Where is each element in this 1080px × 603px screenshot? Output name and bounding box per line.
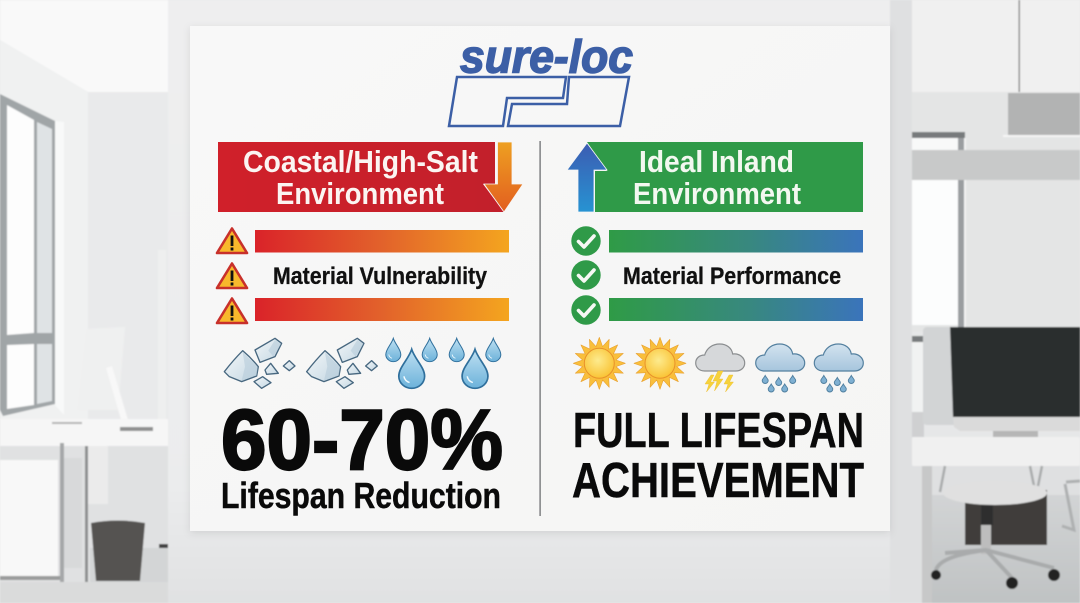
poster board [190,26,890,531]
icon: check 3 [571,295,601,325]
office chair [931,481,1080,589]
icon: rain cloud 2 [814,344,863,392]
stat: full lifespan: FULL LIFESPAN [573,404,864,458]
logo: sure-loc [449,30,633,126]
bar: performance top [609,230,863,252]
icon: sun 2 [634,337,686,389]
panel: ideal inland environment [567,142,864,508]
stat label: lifespan reduction: Lifespan Reduction [221,475,501,516]
divider [539,141,541,516]
stat: 60-70%: 60-70% [221,393,503,488]
bar: vulnerability bottom [255,298,509,321]
waste bin [91,520,145,581]
stat: achievement: ACHIEVEMENT [572,454,864,508]
icon: down arrow [484,142,523,212]
icon: thunder cloud [696,344,745,392]
icon: warning 1 [217,228,247,253]
header text: inland line 2: Environment [633,176,801,211]
icon: check 1 [571,226,601,256]
icon: up arrow [567,143,607,212]
icon: rain cloud 1 [756,344,805,392]
icon: warning 3 [217,298,247,323]
header banner: coastal [218,142,523,212]
icon: warning 2 [217,264,247,288]
logo wordmark: sure-loc [460,30,633,82]
right office room [912,0,1080,603]
left office room [0,0,168,603]
icons: water drops [386,338,501,388]
icons: salt crystals 1 [224,338,295,388]
header text: coastal line 1: Coastal/High-Salt [243,144,478,179]
monitor back [923,327,958,425]
monitor [950,327,1080,417]
bar: vulnerability top [255,230,509,252]
header text: coastal line 2: Environment [276,176,444,211]
central wall [168,0,912,603]
logo mark [449,77,629,126]
header text: inland line 1: Ideal Inland [639,144,794,179]
icon: sun 1 [573,337,625,389]
bar: performance bottom [609,298,863,321]
icon: check 2 [571,260,601,290]
icons: salt crystals 2 [307,338,377,388]
panel: coastal high-salt environment [217,142,523,516]
label: material vulnerability: Material Vulnerability [273,263,487,290]
header banner: inland [567,142,863,212]
label: material performance: Material Performance [623,263,841,290]
